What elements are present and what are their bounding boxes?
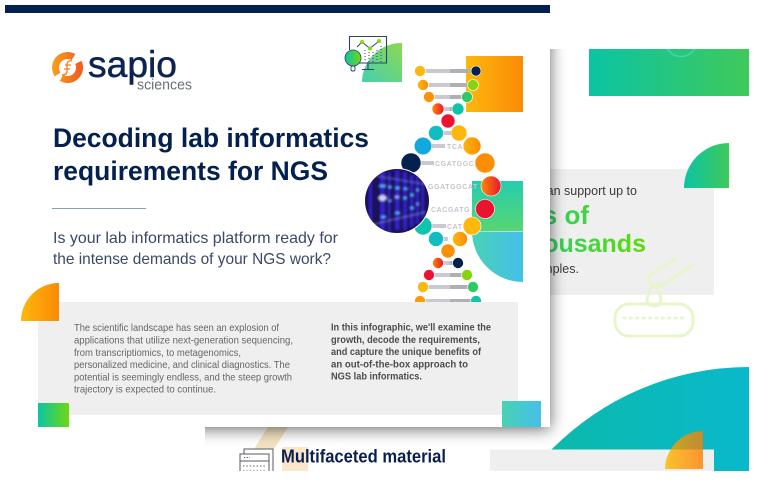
bold intro callout	[331, 322, 491, 382]
subtitle: the intense demands of your NGS work?	[53, 251, 331, 268]
intro paragraph	[74, 322, 293, 396]
bold intro callout: In this infographic, we'll examine the	[331, 322, 491, 334]
icon: green quarter behind analytics icon	[362, 43, 402, 82]
panel: intro text	[38, 302, 518, 415]
subtitle: Is your lab informatics platform ready for	[53, 230, 339, 247]
stat text	[550, 186, 645, 276]
intro paragraph: potential is seemingly endless, and the steep growth	[74, 372, 292, 384]
panel: back page peeking behind the cover	[205, 49, 749, 471]
stat text: can support up to	[540, 184, 637, 198]
stat text: thousands	[520, 230, 646, 258]
intro paragraph: from transcriptiomics, to metagenomics,	[74, 347, 241, 359]
panel: cover page	[0, 0, 550, 427]
title: requirements for NGS	[53, 156, 328, 186]
base letters on rungs: CACGATG	[431, 207, 470, 214]
bold intro callout: an out-of-the-box approach to	[331, 358, 468, 370]
divider	[52, 208, 146, 209]
helix right-strand nodes	[441, 66, 501, 306]
base letters on rungs: CAT	[447, 224, 463, 231]
icon: browser windows	[240, 448, 274, 471]
top teal-green banner	[589, 49, 749, 96]
sequencing gel photo circle	[364, 168, 430, 234]
teal square accent	[502, 401, 541, 427]
base letters on rungs	[428, 144, 480, 231]
base letters on rungs: CGATGGCA	[435, 161, 480, 168]
title: Decoding lab informatics	[53, 123, 369, 153]
shadow cast by cover page	[205, 49, 562, 441]
green square accent	[38, 403, 69, 427]
logo: Sapio Sciences: sciences	[137, 76, 192, 94]
intro paragraph: The scientific landscape has seen an explosion of	[74, 322, 279, 334]
lower grey card	[490, 450, 714, 472]
helix left-strand nodes	[401, 66, 444, 306]
helix rungs	[411, 71, 476, 301]
orange quarter accent	[21, 283, 59, 321]
intro paragraph: trajectory is expected to continue.	[74, 384, 216, 396]
logo: Sapio Sciences	[56, 44, 192, 94]
top navy bar	[5, 5, 550, 13]
intro paragraph: personalized medicine, and clinical diagnostics. The	[74, 359, 290, 371]
icon: logo ring	[56, 56, 80, 80]
faint orange accent shapes	[254, 427, 308, 471]
teal-blue quarter circle behind helix	[472, 232, 523, 282]
icon: faint pipette and petri dish	[615, 259, 693, 336]
stat card background	[550, 169, 714, 295]
subtitle	[53, 230, 339, 268]
DNA helix illustration	[401, 66, 501, 306]
bold intro callout: growth, decode the requirements,	[331, 334, 480, 346]
teal-green square behind helix	[472, 181, 523, 231]
logo: Sapio Sciences: sapio	[88, 44, 177, 85]
bold intro callout: NGS lab informatics.	[331, 370, 422, 382]
icon: analytics monitor with bulb	[345, 36, 386, 71]
stat text: tens of	[504, 200, 589, 230]
orange square behind helix	[466, 56, 523, 112]
section heading: Multifaceted material	[281, 446, 446, 466]
title	[53, 123, 369, 186]
base letters on rungs: GGATGGCAT	[428, 184, 478, 191]
stat text: samples.	[529, 262, 579, 276]
intro paragraph: applications that utilize next-generation sequencing,	[74, 334, 293, 346]
base letters on rungs: TCAC	[447, 144, 469, 151]
icon: green quarter circle	[684, 143, 729, 188]
bold intro callout: and capture the unique benefits of	[331, 346, 481, 358]
big teal quarter shape	[552, 367, 749, 471]
orange quarter over card	[665, 431, 703, 469]
